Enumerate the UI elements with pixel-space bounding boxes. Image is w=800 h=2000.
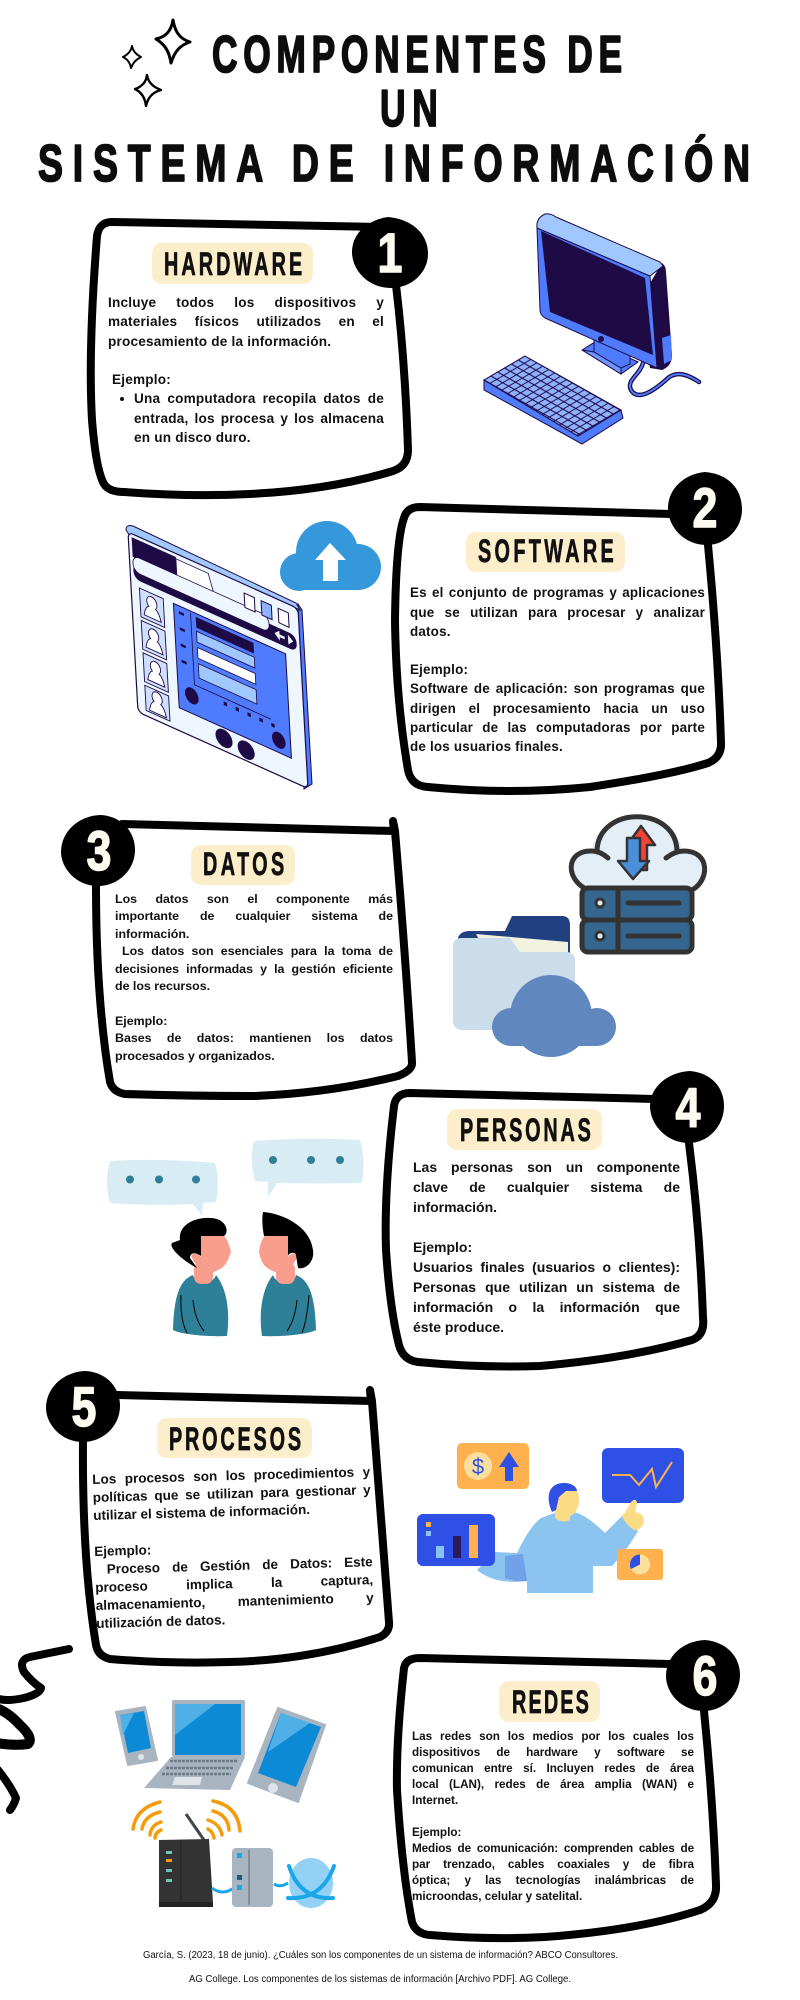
card: coin and arrow — [457, 1443, 529, 1489]
text: redes description: dispositivos de hardware y software se — [412, 1746, 694, 1759]
text: software description: que se utilizan para procesar y analizar — [410, 605, 705, 620]
globe — [288, 1858, 334, 1908]
text: procesos description: Ejemplo: — [94, 1542, 151, 1558]
text: redes description: microondas, celular y satelital. — [412, 1890, 582, 1903]
decorative scribble — [0, 1649, 69, 1810]
text: software description: Es el conjunto de programas y aplicaciones — [410, 585, 705, 600]
text: datos description: información. — [115, 927, 189, 941]
text: software description: Software de aplicación: son programas que — [410, 681, 705, 696]
modem — [232, 1848, 273, 1907]
server — [582, 888, 692, 952]
text: personas description: Personas que utilizan un sistema de — [413, 1279, 680, 1295]
number badge 5 — [46, 1371, 120, 1442]
text: personas description: clave de cualquier sistema de — [413, 1179, 680, 1195]
icon: sparkle stars — [123, 20, 190, 106]
speech bubble left — [107, 1160, 218, 1216]
folder — [453, 916, 616, 1057]
icon: desktop computer — [484, 214, 699, 444]
text: datos description: decisiones informadas y la gestión eficiente — [115, 962, 393, 976]
heading: software: SOFTWARE — [478, 533, 614, 569]
text: software description: de los usuarios finales. — [410, 739, 563, 754]
card: pie chart — [617, 1549, 663, 1580]
text: datos description: Los datos son el componente más — [115, 892, 393, 906]
text: redes description: Medios de comunicación: comprenden cables de — [412, 1842, 694, 1855]
text: redes description: Internet. — [412, 1794, 458, 1807]
person right — [259, 1212, 316, 1336]
heading: personas: PERSONAS — [460, 1112, 591, 1148]
text: procesos description: Proceso de Gestión de Datos: Este — [107, 1554, 373, 1576]
number badge 1: 1 — [378, 221, 402, 284]
router — [159, 1814, 213, 1907]
laptop — [144, 1700, 245, 1790]
text: datos description: Bases de datos: mantienen los datos — [115, 1031, 393, 1045]
cloud — [571, 816, 704, 890]
text: procesos description: almacenamiento, mantenimiento y — [96, 1590, 374, 1612]
text: datos description: procesados y organizados. — [115, 1049, 275, 1063]
cables — [212, 1883, 288, 1892]
speech bubble right — [252, 1139, 364, 1197]
text: hardware description: Ejemplo: — [112, 372, 171, 387]
text: redes description: Ejemplo: — [412, 1826, 461, 1839]
text: redes description: local (LAN), redes de área amplia (WAN) e — [412, 1778, 694, 1791]
wifi waves — [133, 1801, 240, 1838]
number badge 3: 3 — [87, 819, 111, 882]
text: personas description: Ejemplo: — [413, 1239, 472, 1255]
number badge 4 — [650, 1071, 724, 1143]
text: software description: dirigen el procesamiento hacia un uso — [410, 701, 705, 716]
title: UN — [380, 80, 438, 138]
icon: cloud server and folder — [453, 816, 705, 1057]
references: García, S. (2023, 18 de junio). ¿Cuáles son los componentes de un sistema de información? ABCO Consultores. — [143, 1950, 618, 1961]
text: software description: particular de las computadoras por parte — [410, 720, 705, 735]
text: datos description: importante de cualquier sistema de — [115, 909, 393, 923]
number badge 2: 2 — [693, 476, 717, 539]
text: procesos description: utilizar el sistema de información. — [93, 1501, 310, 1522]
sync arrows — [618, 826, 655, 879]
phone — [116, 1707, 157, 1765]
heading: procesos: PROCESOS — [169, 1421, 301, 1457]
text: personas description: Usuarios finales (usuarios o clientes): — [413, 1259, 680, 1275]
number badge 3 — [61, 815, 135, 886]
panel: hardware — [91, 217, 428, 495]
panel: procesos — [46, 1371, 389, 1663]
panel: software — [395, 472, 742, 791]
title: COMPONENTES DE — [212, 26, 622, 84]
text: hardware description: Una computadora recopila datos de — [134, 391, 384, 406]
text: hardware description: procesamiento de la información. — [108, 334, 331, 349]
icon: two people talking — [107, 1139, 364, 1336]
text: redes description: óptica; y las tecnologías inalámbricas de — [412, 1874, 694, 1887]
text: personas description: información. — [413, 1199, 497, 1215]
references: AG College. Los componentes de los sistemas de información [Archivo PDF]. AG College. — [189, 1974, 571, 1985]
text: personas description — [413, 1156, 680, 1346]
icon: upload cloud — [280, 521, 381, 591]
text: datos description: de los recursos. — [115, 979, 210, 993]
text: procesos description: proceso implica la captura, — [95, 1572, 373, 1594]
text: software description: datos. — [410, 624, 451, 639]
icon: network devices — [116, 1700, 334, 1908]
card: bar chart — [417, 1514, 495, 1566]
number badge 5: 5 — [72, 1375, 96, 1438]
text: datos description — [115, 891, 393, 1071]
text: datos description: Ejemplo: — [115, 1014, 167, 1028]
icon: software window — [126, 526, 312, 789]
heading: hardware: HARDWARE — [164, 246, 302, 282]
panel: redes — [397, 1640, 740, 1938]
number badge 6: 6 — [693, 1644, 717, 1707]
text: personas description: Las personas son un componente — [413, 1158, 680, 1174]
panel: datos — [61, 815, 412, 1096]
number badge 4: 4 — [676, 1076, 700, 1139]
tablet — [248, 1708, 325, 1802]
text: hardware description: Incluye todos los dispositivos y — [108, 295, 384, 310]
title — [38, 26, 750, 192]
number badge 2 — [668, 472, 742, 545]
text: procesos description: utilización de datos. — [96, 1612, 225, 1630]
text: redes description: comunican entre sí. Incluyen redes de área — [412, 1762, 694, 1775]
panel: personas — [386, 1071, 724, 1366]
heading: datos: DATOS — [203, 846, 284, 882]
card: line chart — [602, 1448, 684, 1503]
number badge 1 — [352, 217, 428, 288]
text: redes description — [412, 1729, 694, 1909]
person left — [171, 1218, 231, 1336]
text: hardware description: entrada, los procesa y los almacena — [134, 411, 384, 426]
text: hardware description: materiales físicos utilizados en el — [108, 314, 384, 329]
heading: redes — [499, 1681, 600, 1722]
title: SISTEMA DE INFORMACIÓN — [38, 133, 750, 192]
text: procesos description — [92, 1463, 375, 1640]
text: redes description: par trenzado, cables coaxiales y de fibra — [412, 1858, 694, 1871]
number badge 6 — [666, 1640, 740, 1711]
references — [143, 1950, 618, 1985]
keyboard — [484, 356, 623, 444]
text: hardware description — [108, 293, 384, 453]
text: procesos description: Los procesos son los procedimientos y — [92, 1464, 370, 1486]
text: procesos description: políticas que se utilizan para gestionar y — [93, 1482, 371, 1504]
text: personas description: información o la información que — [413, 1299, 680, 1315]
card: coin and arrow: $ — [472, 1454, 484, 1479]
heading: redes: REDES — [512, 1684, 589, 1720]
text: redes description: Las redes son los medios por los cuales los — [412, 1730, 694, 1743]
text: personas description: éste produce. — [413, 1319, 504, 1335]
text: software description — [410, 583, 705, 763]
icon: person with charts — [417, 1443, 684, 1593]
text: hardware description: en un disco duro. — [134, 430, 251, 445]
text: datos description: Los datos son esenciales para la toma de — [122, 944, 393, 958]
presenter — [477, 1483, 644, 1593]
text: software description: Ejemplo: — [410, 662, 468, 677]
